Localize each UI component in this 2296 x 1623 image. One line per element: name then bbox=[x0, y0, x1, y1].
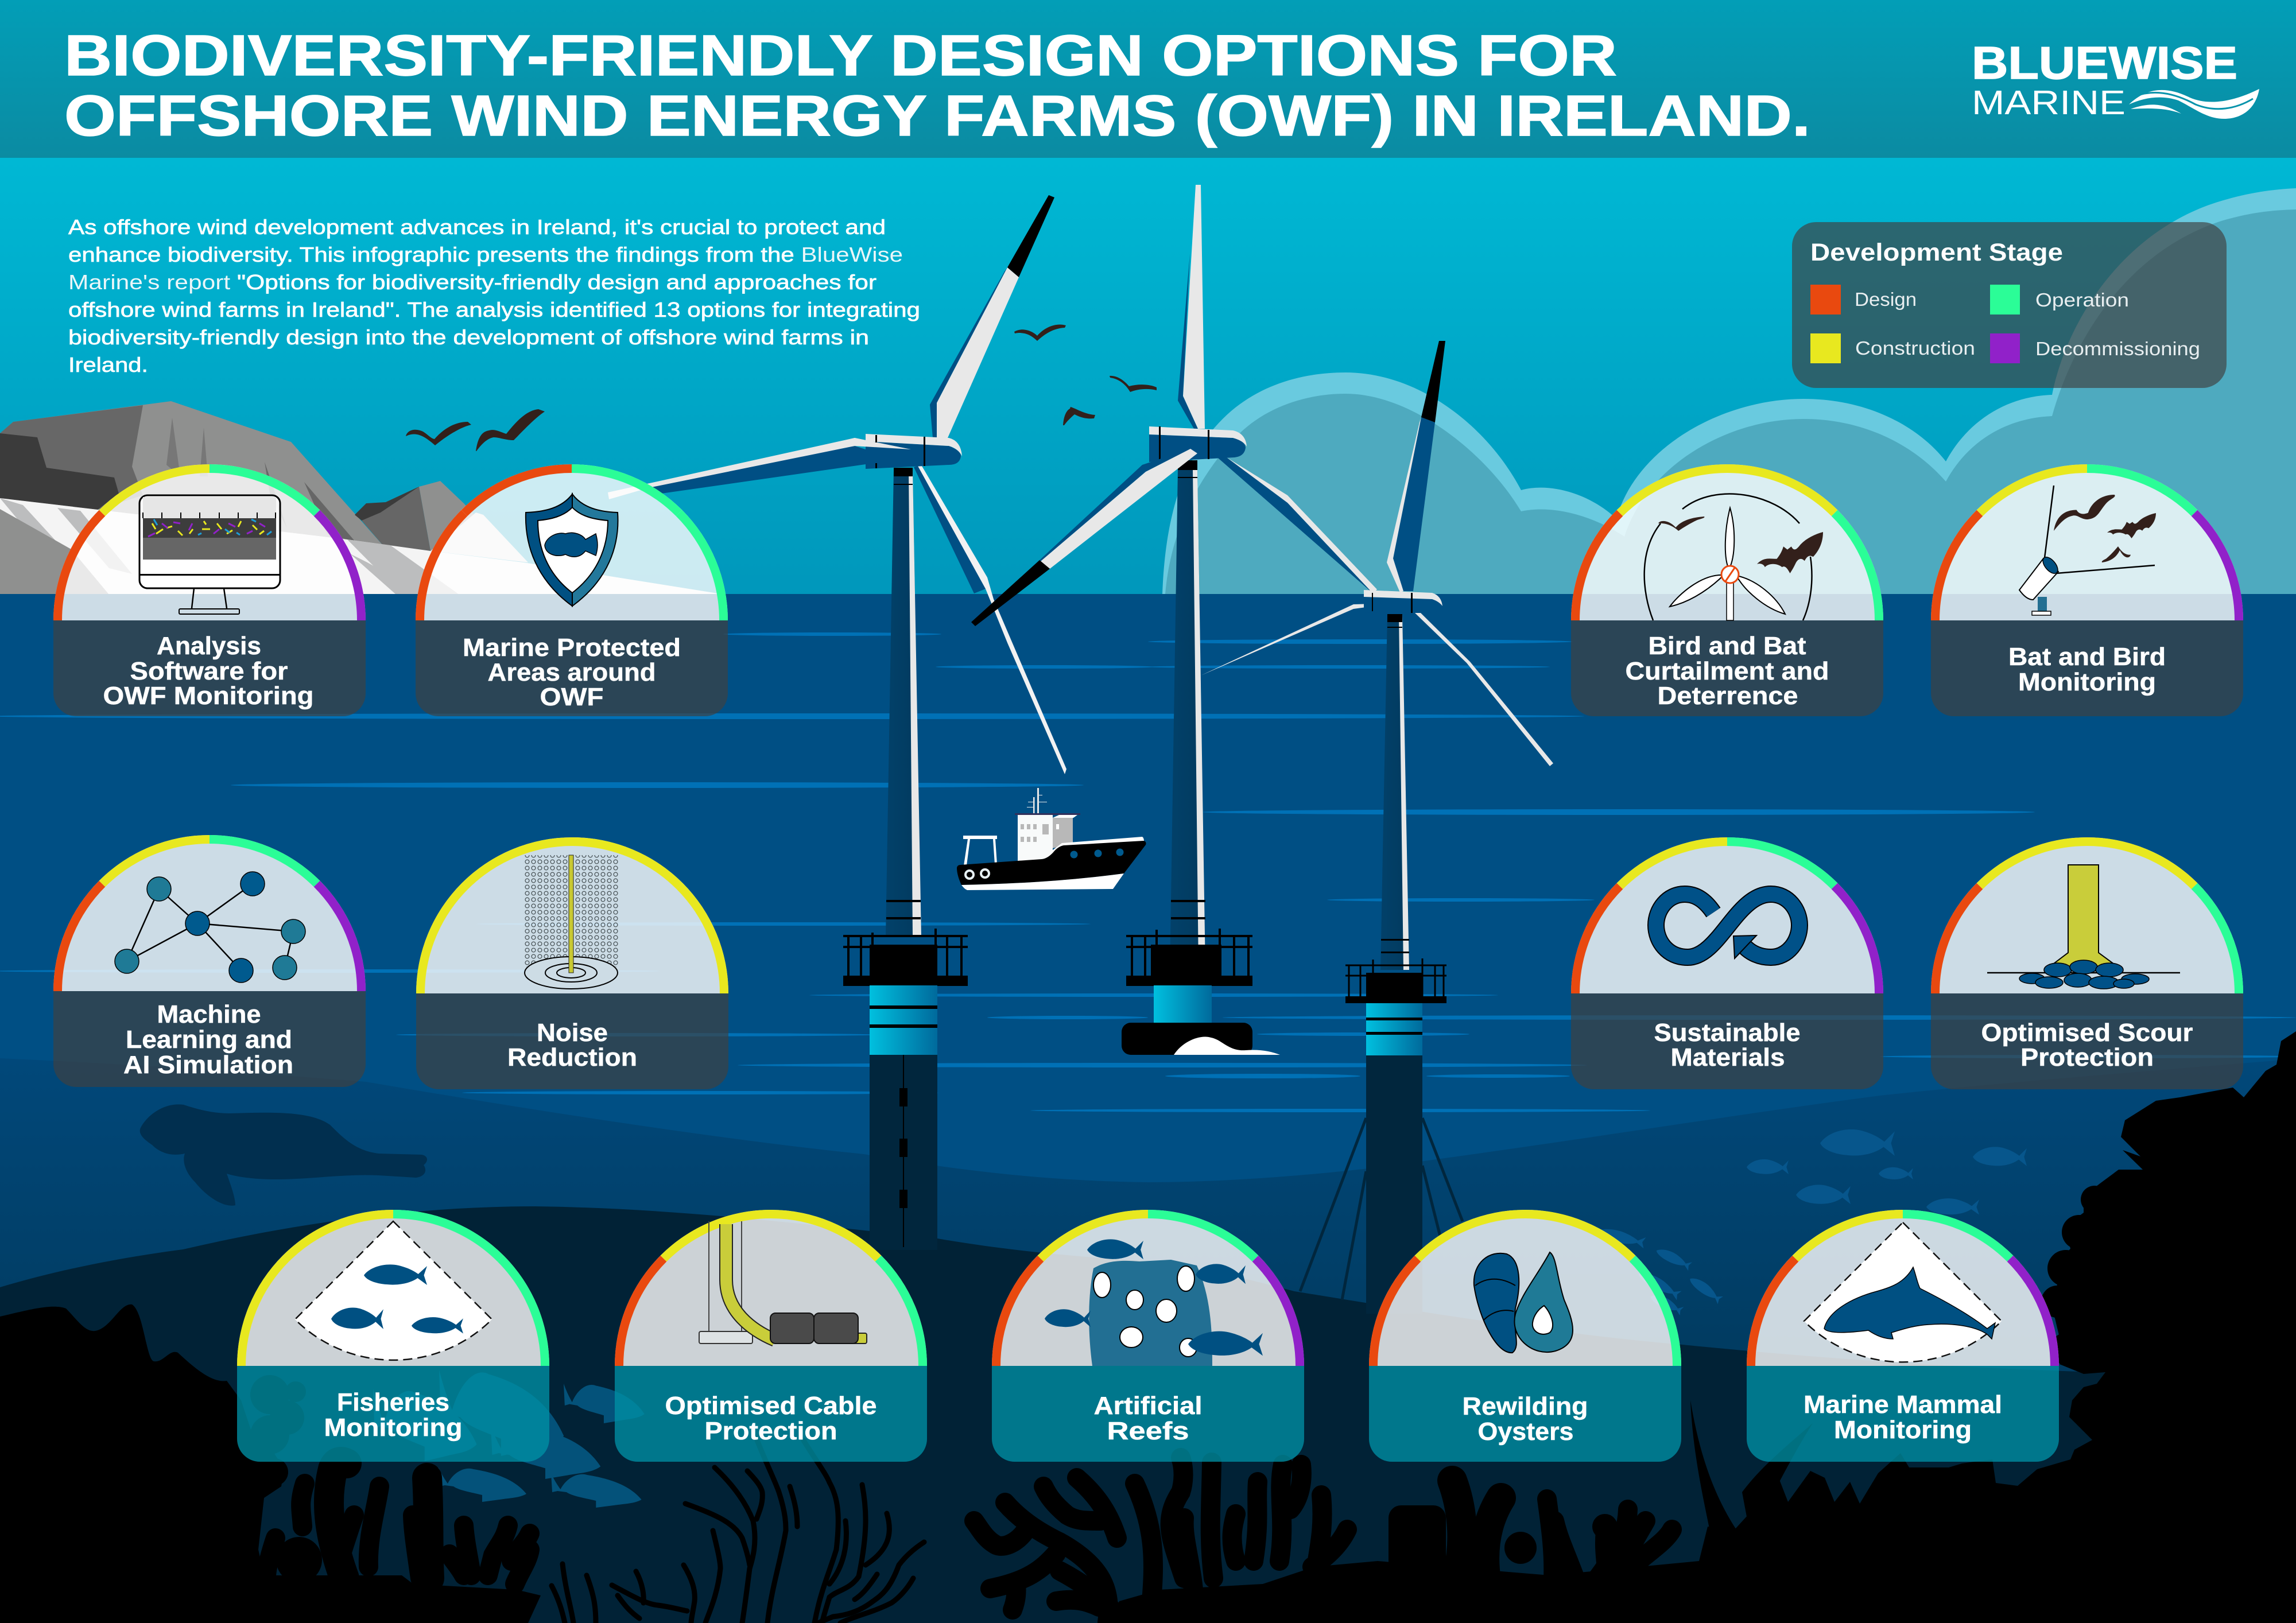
card label: Deterrence bbox=[1658, 682, 1798, 710]
card label: Noise bbox=[537, 1019, 608, 1047]
title: OFFSHORE WIND ENERGY FARMS (OWF) IN IRELAND. bbox=[64, 84, 1810, 148]
card label bbox=[1654, 1019, 1800, 1071]
card label bbox=[1804, 1391, 2002, 1444]
light streaks on the water bbox=[0, 632, 2296, 1112]
school of background fish right bbox=[1593, 1129, 2027, 1315]
card label: Areas around bbox=[488, 658, 656, 686]
seabed mid-ground slope bbox=[0, 1058, 2296, 1623]
legend: development stage: Operation bbox=[2035, 289, 2129, 310]
card label: Marine Protected bbox=[463, 634, 681, 662]
black foreground reef silhouette bbox=[0, 1031, 2296, 1623]
icon: monitor bbox=[139, 495, 280, 614]
card label bbox=[123, 1000, 293, 1079]
card label: Bird and Bat bbox=[1649, 632, 1806, 660]
dark seabed foreground slope bbox=[0, 1206, 2296, 1623]
card label: Materials bbox=[1670, 1043, 1785, 1071]
intro text block: Ireland. bbox=[68, 353, 148, 376]
card label: Monitoring bbox=[1834, 1416, 1972, 1444]
title bbox=[64, 24, 1810, 148]
logo: BlueWise Marine bbox=[1972, 37, 2259, 122]
logo: BlueWise Marine: BLUEWISE bbox=[1972, 37, 2237, 88]
card: Fisheries Monitoring bbox=[237, 1210, 549, 1462]
legend: development stage: Design bbox=[1855, 289, 1917, 310]
card label: Optimised Scour bbox=[1981, 1019, 2193, 1047]
card label bbox=[2008, 643, 2166, 696]
card label: Monitoring bbox=[324, 1414, 463, 1442]
seal silhouette bbox=[140, 1104, 427, 1206]
card: Marine Protected Areas around OWF bbox=[416, 464, 728, 716]
intro text block bbox=[68, 215, 920, 376]
card label: Curtailment and bbox=[1626, 657, 1829, 685]
card label: Protection bbox=[705, 1417, 837, 1445]
icon: turbine with bird and bat bbox=[1645, 494, 1823, 620]
logo: BlueWise Marine: MARINE bbox=[1972, 84, 2126, 122]
card: Bird and Bat Curtailment and Deterrence bbox=[1571, 464, 1883, 716]
card: Noise Reduction bbox=[416, 837, 728, 1089]
sea surface bbox=[0, 594, 2296, 1225]
intro text block: biodiversity-friendly design into the development of offshore wind farms in bbox=[68, 325, 869, 349]
card label bbox=[463, 634, 681, 711]
card label: Protection bbox=[2020, 1043, 2154, 1071]
card label bbox=[507, 1019, 637, 1071]
card label: OWF bbox=[540, 683, 604, 711]
card label: Artificial bbox=[1094, 1392, 1202, 1420]
icon: sonar sector with porpoise bbox=[1804, 1222, 2002, 1362]
card label: Oysters bbox=[1477, 1418, 1574, 1446]
icon: cable with mattress bbox=[699, 1221, 867, 1344]
icon: mussel and oyster shells bbox=[1474, 1252, 1573, 1353]
icon: infinity loop with arrow bbox=[1656, 894, 1799, 958]
card: Artificial Reefs bbox=[992, 1210, 1304, 1462]
icon: sonar sector with fish bbox=[295, 1221, 492, 1360]
card: Optimised Scour Protection bbox=[1931, 837, 2243, 1089]
card label bbox=[1463, 1392, 1588, 1446]
card label: Rewilding bbox=[1463, 1392, 1588, 1420]
icon: monopile with scour rocks bbox=[1987, 865, 2180, 989]
card label bbox=[103, 632, 313, 710]
card label: OWF Monitoring bbox=[103, 682, 313, 710]
intro text block: As offshore wind development advances in Ireland, it's crucial to protect and bbox=[68, 215, 886, 239]
intro text block: Marine's report "Options for biodiversity-friendly design and approaches for bbox=[68, 270, 876, 294]
card label: Reefs bbox=[1107, 1417, 1189, 1445]
card label bbox=[1626, 632, 1829, 710]
card label bbox=[1981, 1019, 2193, 1071]
card label: Sustainable bbox=[1654, 1019, 1800, 1047]
card: Bat and Bird Monitoring bbox=[1931, 464, 2243, 716]
wind turbine 3 bbox=[1201, 341, 1553, 1314]
header band bbox=[0, 0, 2296, 158]
card: Marine Mammal Monitoring bbox=[1747, 1210, 2059, 1462]
clouds on the right horizon bbox=[1162, 188, 2296, 594]
card label: Machine bbox=[157, 1000, 261, 1028]
card label: Analysis bbox=[157, 632, 261, 660]
card label bbox=[1094, 1392, 1202, 1445]
card label bbox=[665, 1392, 877, 1445]
title: BIODIVERSITY-FRIENDLY DESIGN OPTIONS FOR bbox=[64, 24, 1617, 88]
card label: Learning and bbox=[126, 1026, 292, 1054]
wind turbine 2 bbox=[971, 185, 1377, 1055]
wind turbine 1 bbox=[608, 195, 1066, 1250]
card label bbox=[324, 1388, 463, 1442]
card label: Monitoring bbox=[2018, 668, 2156, 696]
fish shoal behind cards bbox=[373, 1370, 645, 1508]
legend: development stage: Construction bbox=[1855, 337, 1975, 359]
card label: Reduction bbox=[507, 1043, 637, 1071]
fishing boat bbox=[957, 788, 1146, 890]
intro text block: enhance biodiversity. This infographic presents the findings from the BlueWise bbox=[68, 243, 903, 266]
sky background bbox=[0, 158, 2296, 597]
card label: Fisheries bbox=[337, 1388, 449, 1416]
cliffs and headland bbox=[0, 401, 721, 595]
intro text block: offshore wind farms in Ireland". The analysis identified 13 options for integrating bbox=[68, 298, 920, 321]
legend: development stage: Development Stage bbox=[1810, 239, 2063, 266]
card label: Software for bbox=[130, 657, 288, 685]
birds in the sky bbox=[406, 325, 1157, 451]
card label: Marine Mammal bbox=[1804, 1391, 2002, 1419]
icon: radar monitoring bbox=[2019, 486, 2156, 615]
legend: development stage: Decommissioning bbox=[2035, 338, 2200, 359]
icon: reef structure with fish bbox=[1045, 1239, 1263, 1366]
card: Sustainable Materials bbox=[1571, 837, 1883, 1089]
card: Analysis Software for OWF Monitoring bbox=[53, 464, 366, 716]
card label: AI Simulation bbox=[123, 1051, 293, 1079]
icon: bubble curtain bbox=[523, 855, 619, 989]
card: Optimised Cable Protection bbox=[615, 1210, 927, 1462]
card: Machine Learning and AI Simulation bbox=[53, 835, 366, 1087]
icon: network graph bbox=[115, 872, 305, 983]
icon: shield with fish bbox=[526, 494, 618, 606]
legend: development stage bbox=[1792, 222, 2227, 388]
card label: Optimised Cable bbox=[665, 1392, 877, 1420]
card: Rewilding Oysters bbox=[1369, 1210, 1681, 1462]
card label: Bat and Bird bbox=[2008, 643, 2166, 671]
